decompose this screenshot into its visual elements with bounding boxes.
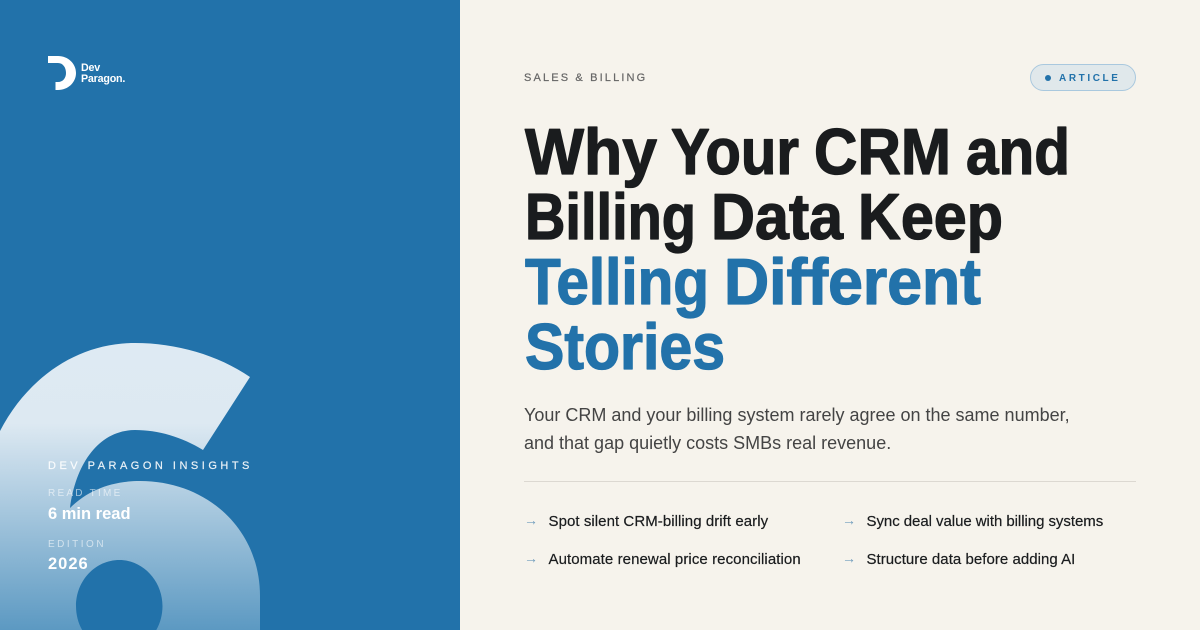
takeaway 2 xyxy=(842,512,1103,530)
takeaway list: Structure data before adding AI xyxy=(866,551,1075,568)
takeaway 3: → xyxy=(524,550,538,566)
takeaway list: Automate renewal price reconciliation xyxy=(548,551,801,568)
title: Different xyxy=(724,245,981,318)
logo wordmark: Dev xyxy=(81,62,100,74)
title: and xyxy=(966,115,1070,188)
panel: content xyxy=(460,0,1200,630)
article badge xyxy=(1030,64,1136,91)
takeaway 1 xyxy=(524,512,768,530)
decorative large numeral 6 xyxy=(0,343,260,630)
title: Billing xyxy=(525,180,696,253)
takeaway list: Sync deal value with billing systems xyxy=(866,513,1103,530)
logo wordmark xyxy=(81,62,125,84)
title: Telling xyxy=(525,245,709,318)
subtitle: and that gap quietly costs SMBs real revenue. xyxy=(524,433,891,453)
edition label: EDITION xyxy=(48,539,106,550)
title: Stories xyxy=(525,310,725,383)
title: Data xyxy=(711,180,844,253)
subtitle xyxy=(524,405,1070,453)
takeaway list: Spot silent CRM-billing drift early xyxy=(548,513,768,530)
meta block xyxy=(48,460,253,573)
divider xyxy=(524,481,1136,482)
read time value: 6 min read xyxy=(48,505,131,523)
category label: SALES & BILLING xyxy=(524,72,647,84)
panel: blue left panel xyxy=(0,0,460,630)
badge text: ARTICLE xyxy=(1059,72,1121,84)
takeaway 1: → xyxy=(524,512,538,528)
takeaway 3 xyxy=(524,550,801,568)
read time label: READ TIME xyxy=(48,488,123,499)
badge dot xyxy=(1045,75,1051,81)
logo wordmark: Paragon. xyxy=(81,72,125,84)
title: Why xyxy=(525,115,657,188)
title xyxy=(524,115,1070,383)
takeaway list xyxy=(524,512,1103,568)
title: CRM xyxy=(814,115,951,188)
title: Keep xyxy=(858,180,1003,253)
edition value: 2026 xyxy=(48,555,89,573)
logo xyxy=(48,56,125,90)
takeaway 4 xyxy=(842,550,1075,568)
subtitle: Your CRM and your billing system rarely agree on the same number, xyxy=(524,405,1070,425)
title: Your xyxy=(671,115,799,188)
logo mark xyxy=(48,56,76,90)
takeaway 4: → xyxy=(842,550,856,566)
series label: DEV PARAGON INSIGHTS xyxy=(48,460,253,472)
takeaway 2: → xyxy=(842,512,856,528)
